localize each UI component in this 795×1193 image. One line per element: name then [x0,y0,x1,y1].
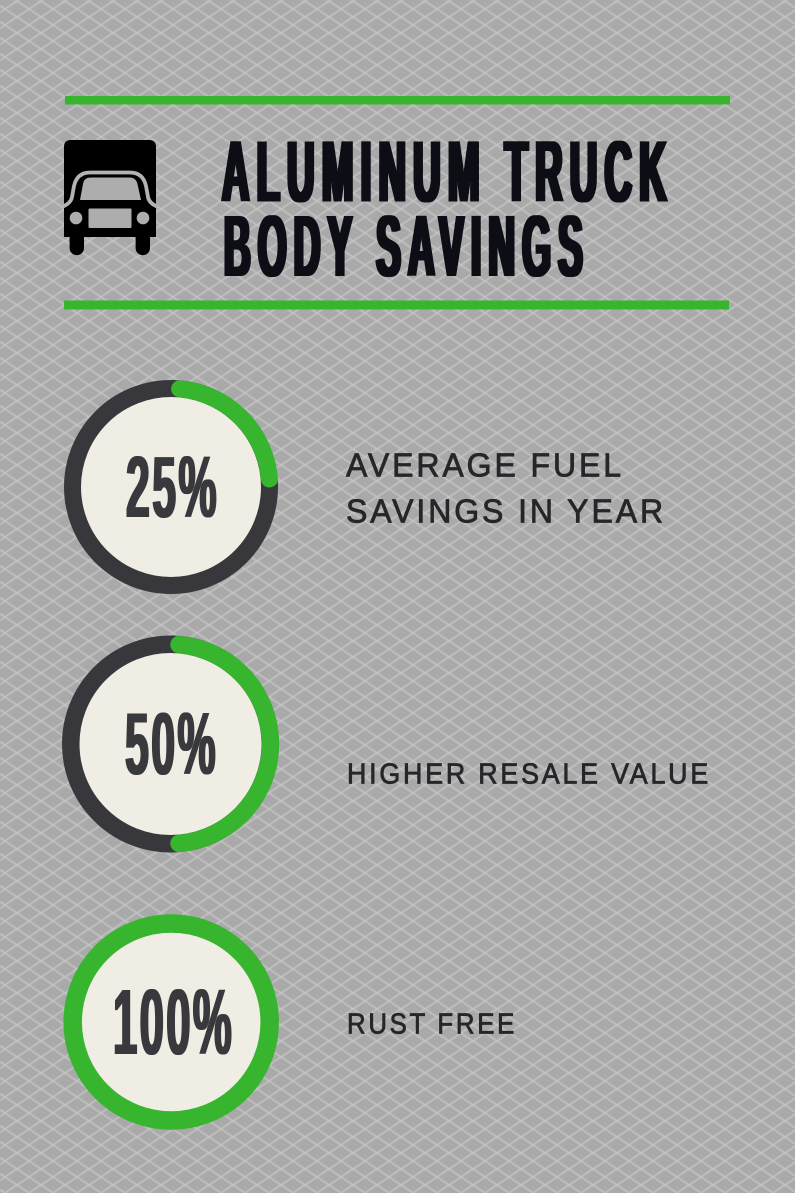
label: average fuel savings: SAVINGS IN YEAR [346,492,666,530]
title [222,124,674,295]
gauge: 25%: 25% [126,439,219,536]
bottom green rule [64,300,729,310]
label: average fuel savings: AVERAGE FUEL [346,446,624,484]
gauge: 50% [71,644,270,844]
gauge: 100% [73,924,270,1120]
icon: truck [63,140,157,255]
gauge: 25% [72,388,270,586]
gauge: 50%: 50% [125,694,218,793]
label: rust free: RUST FREE [347,1008,517,1040]
label: average fuel savings [346,446,666,530]
label: higher resale value: HIGHER RESALE VALUE [347,758,711,790]
top green rule [65,96,730,104]
gauge: 100%: 100% [113,970,234,1074]
